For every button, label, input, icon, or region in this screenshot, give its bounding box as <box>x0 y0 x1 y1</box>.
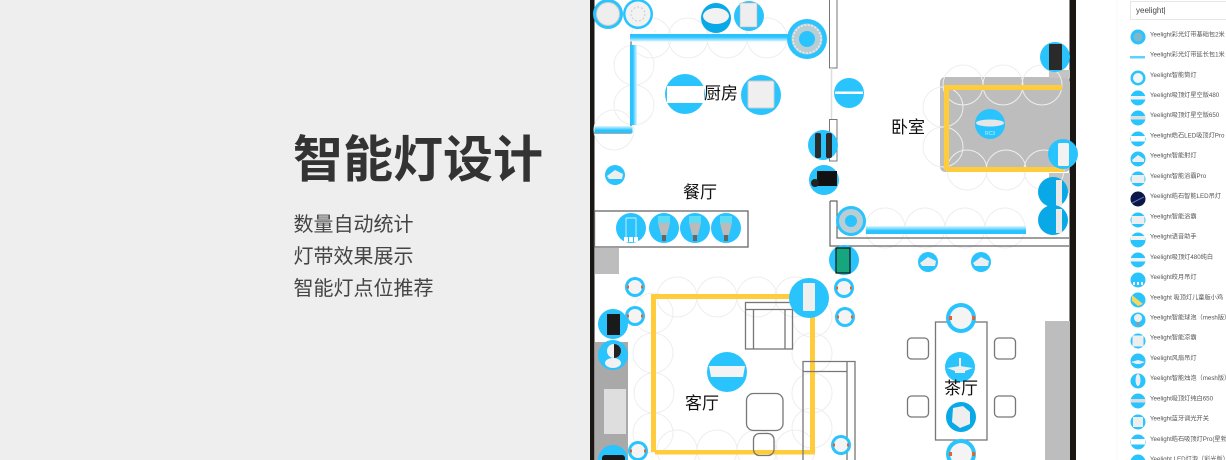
icon: bulb 2 <box>680 213 710 243</box>
feature list <box>294 214 434 300</box>
living room yellow strip <box>651 294 815 454</box>
icon: screen device <box>809 165 839 195</box>
icon: wall panel <box>734 1 764 31</box>
icon: hall light <box>834 78 864 108</box>
kitchen light strip <box>594 34 800 133</box>
outer walls <box>590 0 1076 460</box>
grey furniture blocks <box>595 70 1070 460</box>
product list names: Yeelight皎月吊灯 <box>1150 273 1197 281</box>
ghost light range circles <box>594 18 1064 460</box>
icon: memory card <box>598 309 628 339</box>
icon: ceiling lamp <box>701 3 731 33</box>
label: tea room: 茶厅 <box>944 379 978 398</box>
product list names: Yeelight智能浴霸 <box>1150 212 1197 220</box>
product list names: Yeelight皓石LED吸顶灯Pro <box>1150 132 1225 140</box>
sofa <box>746 302 792 349</box>
icon: spot light 1 <box>918 252 938 272</box>
label: kitchen: 厨房 <box>704 84 738 103</box>
living room stools <box>746 394 783 456</box>
product list names: Yeelight蓝牙调光开关 <box>1150 414 1209 422</box>
icon: bulb 3 <box>711 213 741 243</box>
bedroom light strip <box>866 226 1026 234</box>
icon: dining spot light <box>605 165 625 185</box>
title: 智能灯设计 <box>293 132 543 188</box>
icon: tablet <box>829 245 859 275</box>
product list names: Yeelight智能浴霸Pro <box>1150 172 1207 180</box>
product list icons <box>1130 30 1146 460</box>
bedroom yellow strip <box>944 85 1064 172</box>
icon: strip controller <box>787 19 827 59</box>
icon: door lock <box>808 130 838 160</box>
icon: bulb 1 <box>649 213 679 243</box>
product list names: Yeelight智能射灯 <box>1150 152 1197 160</box>
feature list: 智能灯点位推荐 <box>294 278 434 300</box>
product list names: Yeelight吸顶灯480纯白 <box>1150 253 1213 261</box>
icon: tea room downlight top <box>946 303 976 333</box>
icon: bedroom ceiling light <box>975 109 1005 139</box>
icon: sensor top <box>1038 177 1068 207</box>
product list names: Yeelight吸顶灯星空版650 <box>1150 111 1220 119</box>
product list names: Yeelight 吸顶灯儿童版小鸡 <box>1150 294 1223 302</box>
product list names: Yeelight语音助手 <box>1150 232 1197 240</box>
feature list: 数量自动统计 <box>294 214 414 236</box>
icon: white gateway <box>1048 139 1078 169</box>
icon: spot light 2 <box>971 252 991 272</box>
label: bedroom: 卧室 <box>891 118 925 137</box>
product list names: Yeelight彩光灯带延长包1米 <box>1150 50 1225 58</box>
product list names: Yeelight智能凉霸 <box>1150 334 1197 342</box>
icon: black speaker <box>1040 42 1070 72</box>
icon: fan lamp <box>945 352 975 382</box>
icon: smart switch round <box>593 0 623 29</box>
product list names: Yeelight风扇吊灯 <box>1150 354 1197 362</box>
icon: downlight rings <box>625 277 855 460</box>
search box: yeelight| <box>1136 6 1166 15</box>
icon: camera <box>598 340 628 370</box>
icon: bedroom ceiling light: RC3 <box>985 131 995 137</box>
product list names: Yeelight皓石智能LED吊灯 <box>1150 192 1221 200</box>
label: living room: 客厅 <box>685 394 719 413</box>
feature list: 灯带效果展示 <box>294 246 414 268</box>
bed <box>803 362 855 460</box>
product list names: Yeelight皓石吸顶灯Pro(星勃 <box>1150 435 1226 443</box>
product list names: Yeelight吸顶灯星空版480 <box>1150 91 1220 99</box>
product list names: Yeelight彩光灯带基础包2米 <box>1150 30 1225 38</box>
icon: living room gateway <box>789 278 829 318</box>
product list names: Yeelight吸顶灯纯白650 <box>1150 394 1214 402</box>
left background panel <box>0 0 590 460</box>
panel divider <box>1116 0 1118 460</box>
icon: smart speaker round <box>623 0 653 29</box>
tea room table and chairs <box>908 322 1016 440</box>
product list names <box>1150 30 1226 460</box>
icon: kitchen panel light <box>665 74 705 114</box>
interior walls and door frames <box>594 0 1069 246</box>
icon: cube sensor <box>946 402 976 432</box>
product list names: Yeelight智能筒灯 <box>1150 71 1197 79</box>
icon: bedroom strip controller <box>836 206 866 236</box>
icon: living room ceiling light <box>707 352 747 392</box>
dining table shelf <box>594 211 748 247</box>
search box <box>1130 2 1226 20</box>
icon: kitchen bath heater <box>741 75 781 115</box>
icon: sensor bottom <box>1038 205 1068 235</box>
icon: tea room downlight bottom <box>946 439 976 460</box>
icon: pendant lamp <box>616 213 646 243</box>
icon: black device <box>598 445 628 460</box>
label: dining room: 餐厅 <box>683 183 717 202</box>
